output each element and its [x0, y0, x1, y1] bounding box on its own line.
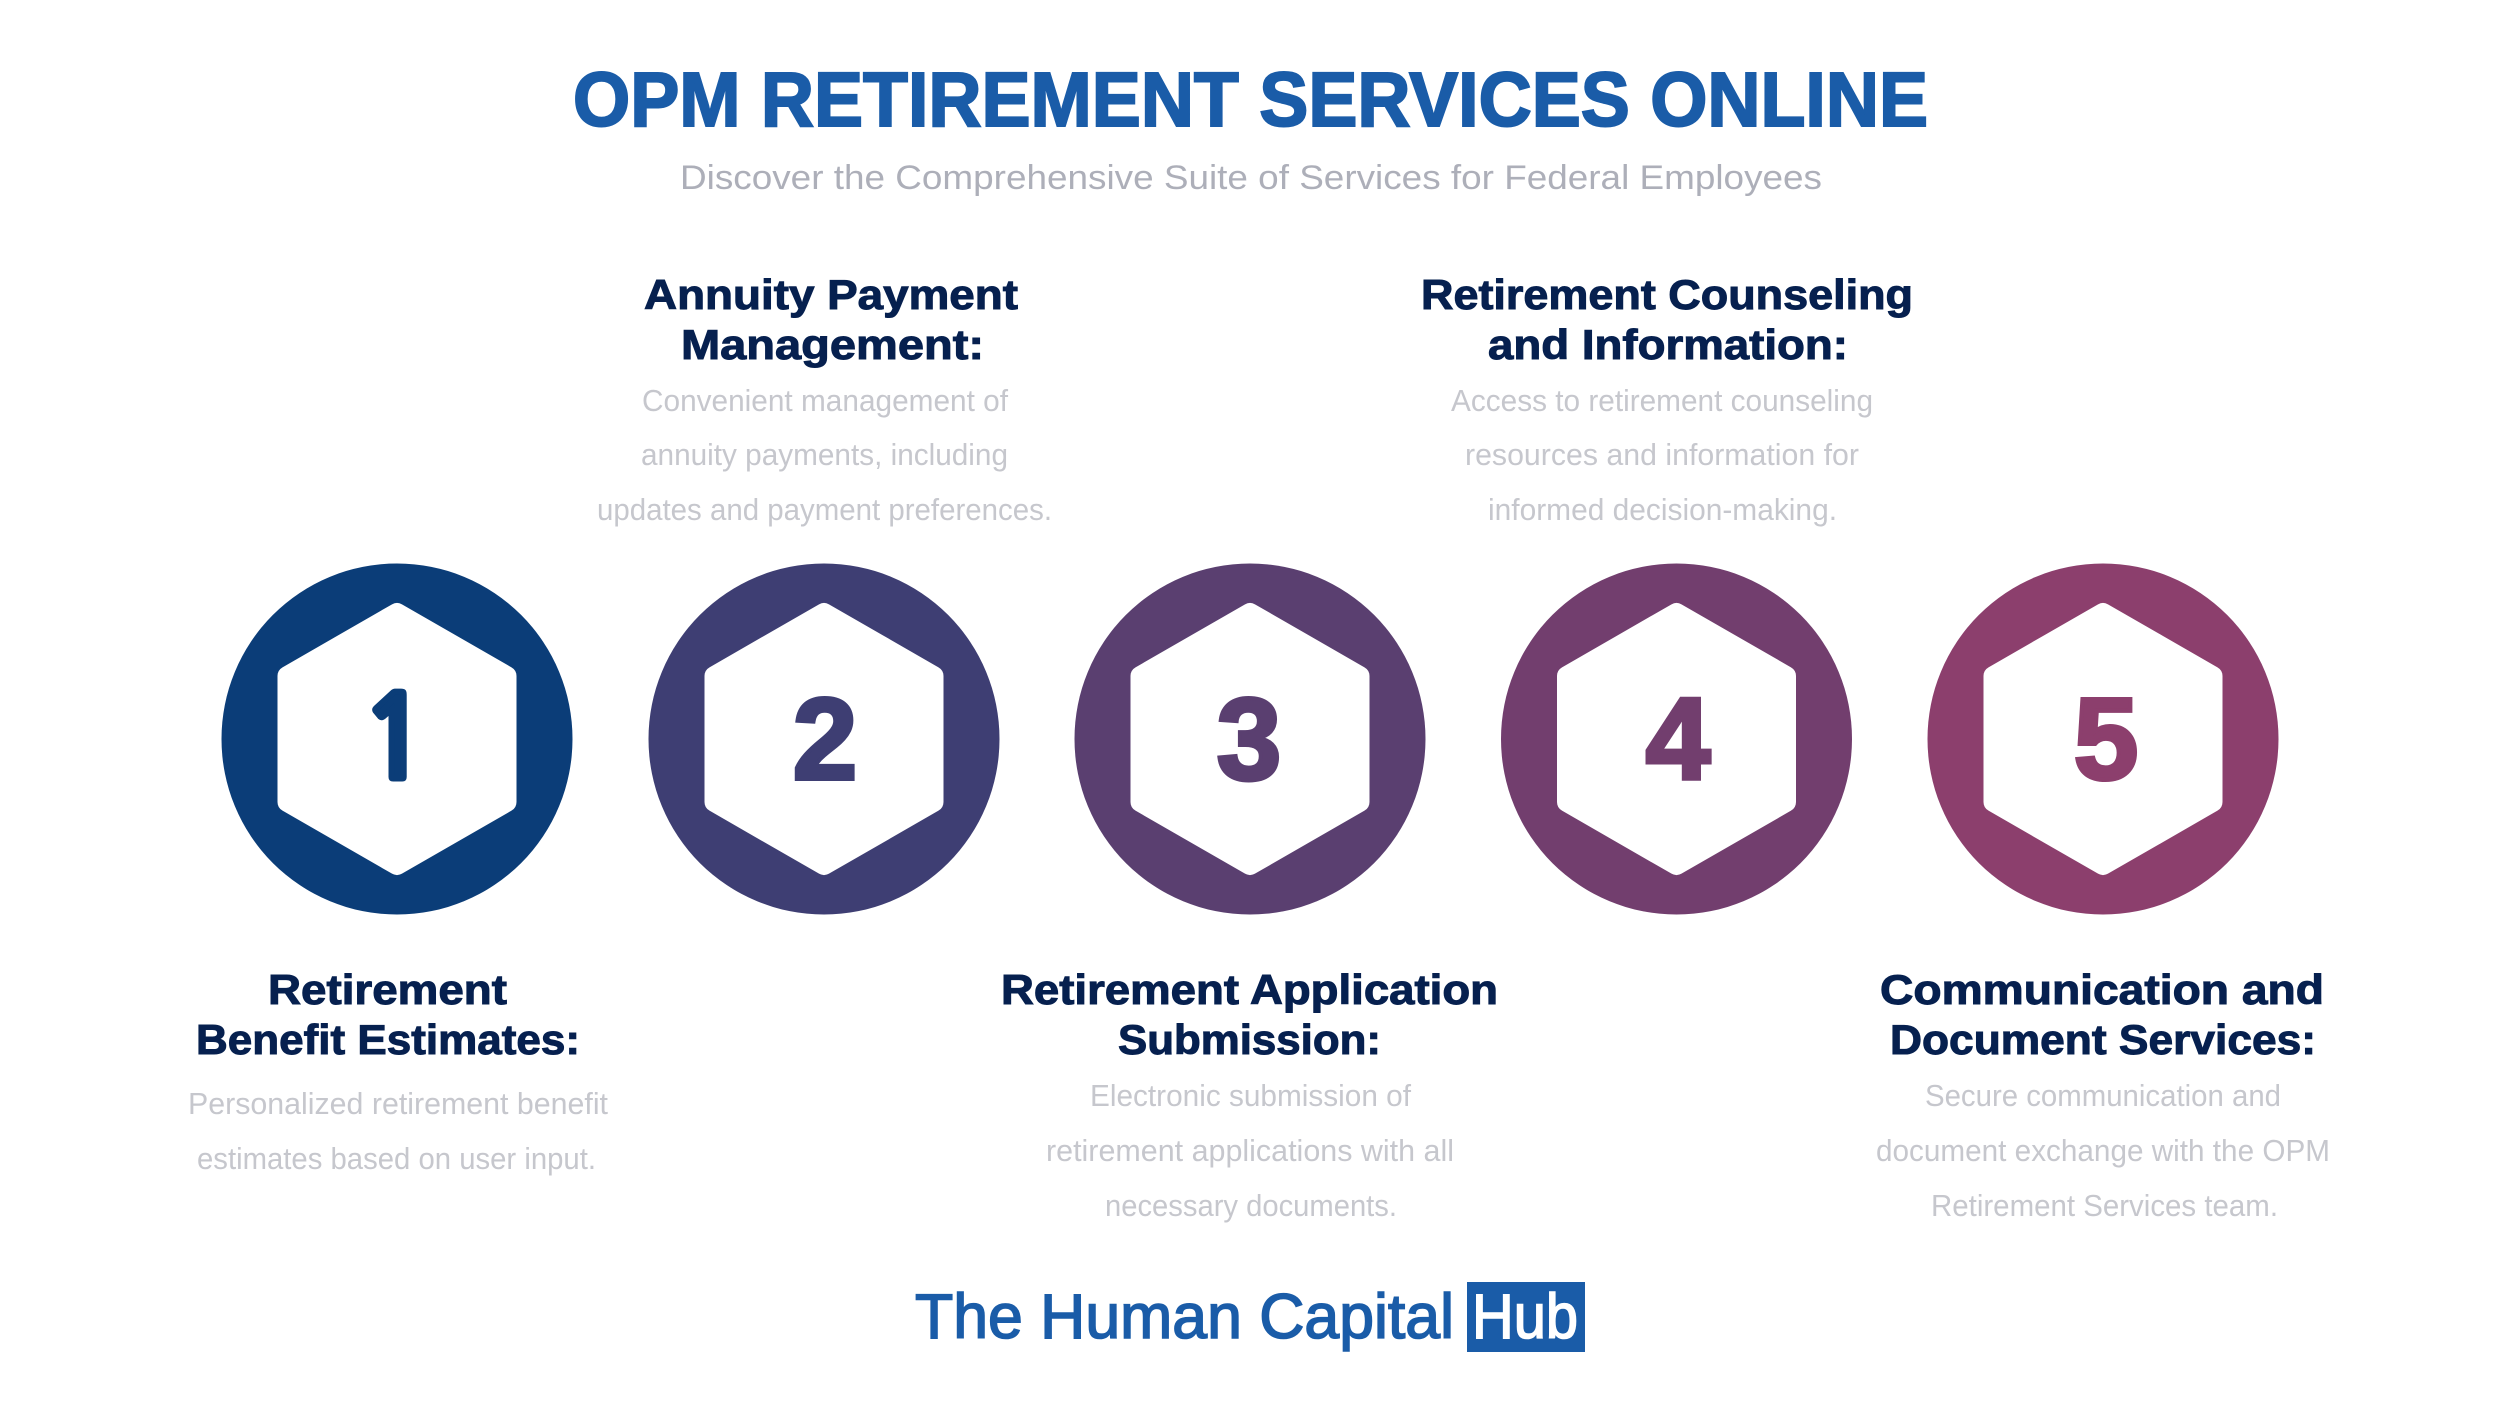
text block: benefit estimates description — [188, 1086, 608, 1176]
text block: communication description: Secure communication and — [1925, 1078, 2281, 1113]
icon: step 2 circle: 2 — [793, 674, 857, 804]
text block: communication description: Retirement Services team. — [1931, 1188, 2278, 1223]
text block: retirement counseling description: resources and information for — [1465, 437, 1859, 472]
subtitle: Discover the Comprehensive Suite of Services for Federal Employees — [680, 159, 1822, 197]
panel: annuity payment management — [597, 271, 1052, 527]
text block: communication description — [1876, 1078, 2330, 1223]
logo: The Human Capital Hub: The Human Capital — [915, 1282, 1454, 1352]
icon: step 5 circle — [1928, 564, 2278, 914]
text block: retirement counseling description: informed decision-making. — [1488, 492, 1837, 527]
logo: The Human Capital Hub: Hub — [1472, 1282, 1578, 1352]
heading: annuity payment management: Management: — [681, 321, 984, 368]
text block: application submission description: Electronic submission of — [1090, 1078, 1411, 1113]
panel: retirement benefit estimates — [188, 966, 608, 1176]
icon: step 2 circle — [648, 564, 1000, 914]
text block: application submission description — [1046, 1078, 1454, 1223]
heading: retirement benefit estimates: Benefit Estimates: — [196, 1016, 580, 1063]
heading: communication and document services: Document Services: — [1890, 1016, 2316, 1063]
text block: benefit estimates description: Personalized retirement benefit — [188, 1086, 608, 1121]
text block: annuity payment description: Convenient management of — [642, 383, 1008, 418]
icon: step 3 circle: 3 — [1217, 674, 1281, 804]
icon: step 1 circle: 1 — [360, 682, 430, 795]
heading: communication and document services: Communication and — [1880, 966, 2324, 1013]
heading: retirement application submission: Submission: — [1118, 1016, 1381, 1063]
heading: annuity payment management — [644, 271, 1018, 368]
heading: communication and document services — [1880, 966, 2324, 1063]
heading: annuity payment management: Annuity Payment — [644, 271, 1018, 318]
text block: application submission description: retirement applications with all — [1046, 1133, 1454, 1168]
heading: retirement counseling and information: Retirement Counseling — [1421, 271, 1913, 318]
text block: annuity payment description: updates and payment preferences. — [597, 492, 1052, 527]
text block: communication description: document exchange with the OPM — [1876, 1133, 2330, 1168]
heading: retirement counseling and information — [1421, 271, 1913, 368]
icon: step 4 circle: 4 — [1646, 674, 1710, 804]
text block: benefit estimates description: estimates based on user input. — [197, 1141, 596, 1176]
heading: retirement benefit estimates: Retirement — [268, 966, 507, 1013]
text block: retirement counseling description — [1451, 383, 1873, 527]
text block: retirement counseling description: Access to retirement counseling — [1451, 383, 1873, 418]
panel: communication and document services — [1876, 966, 2330, 1223]
icon: step 3 circle — [1074, 564, 1426, 914]
title: OPM RETIREMENT SERVICES ONLINE — [573, 57, 1928, 143]
text block: application submission description: necessary documents. — [1105, 1188, 1397, 1223]
icon: step 5 circle: 5 — [2074, 674, 2138, 804]
text block: annuity payment description: annuity payments, including — [641, 437, 1008, 472]
heading: retirement counseling and information: and Information: — [1488, 321, 1848, 368]
icon: step 4 circle — [1501, 564, 1852, 914]
heading: retirement application submission: Retirement Application — [1001, 966, 1498, 1013]
icon: step 1 circle — [222, 564, 572, 914]
heading: retirement application submission — [1001, 966, 1498, 1063]
heading: retirement benefit estimates — [196, 966, 580, 1063]
panel: retirement application submission — [1001, 966, 1498, 1223]
panel: retirement counseling and information — [1421, 271, 1913, 527]
text block: annuity payment description — [597, 383, 1052, 527]
